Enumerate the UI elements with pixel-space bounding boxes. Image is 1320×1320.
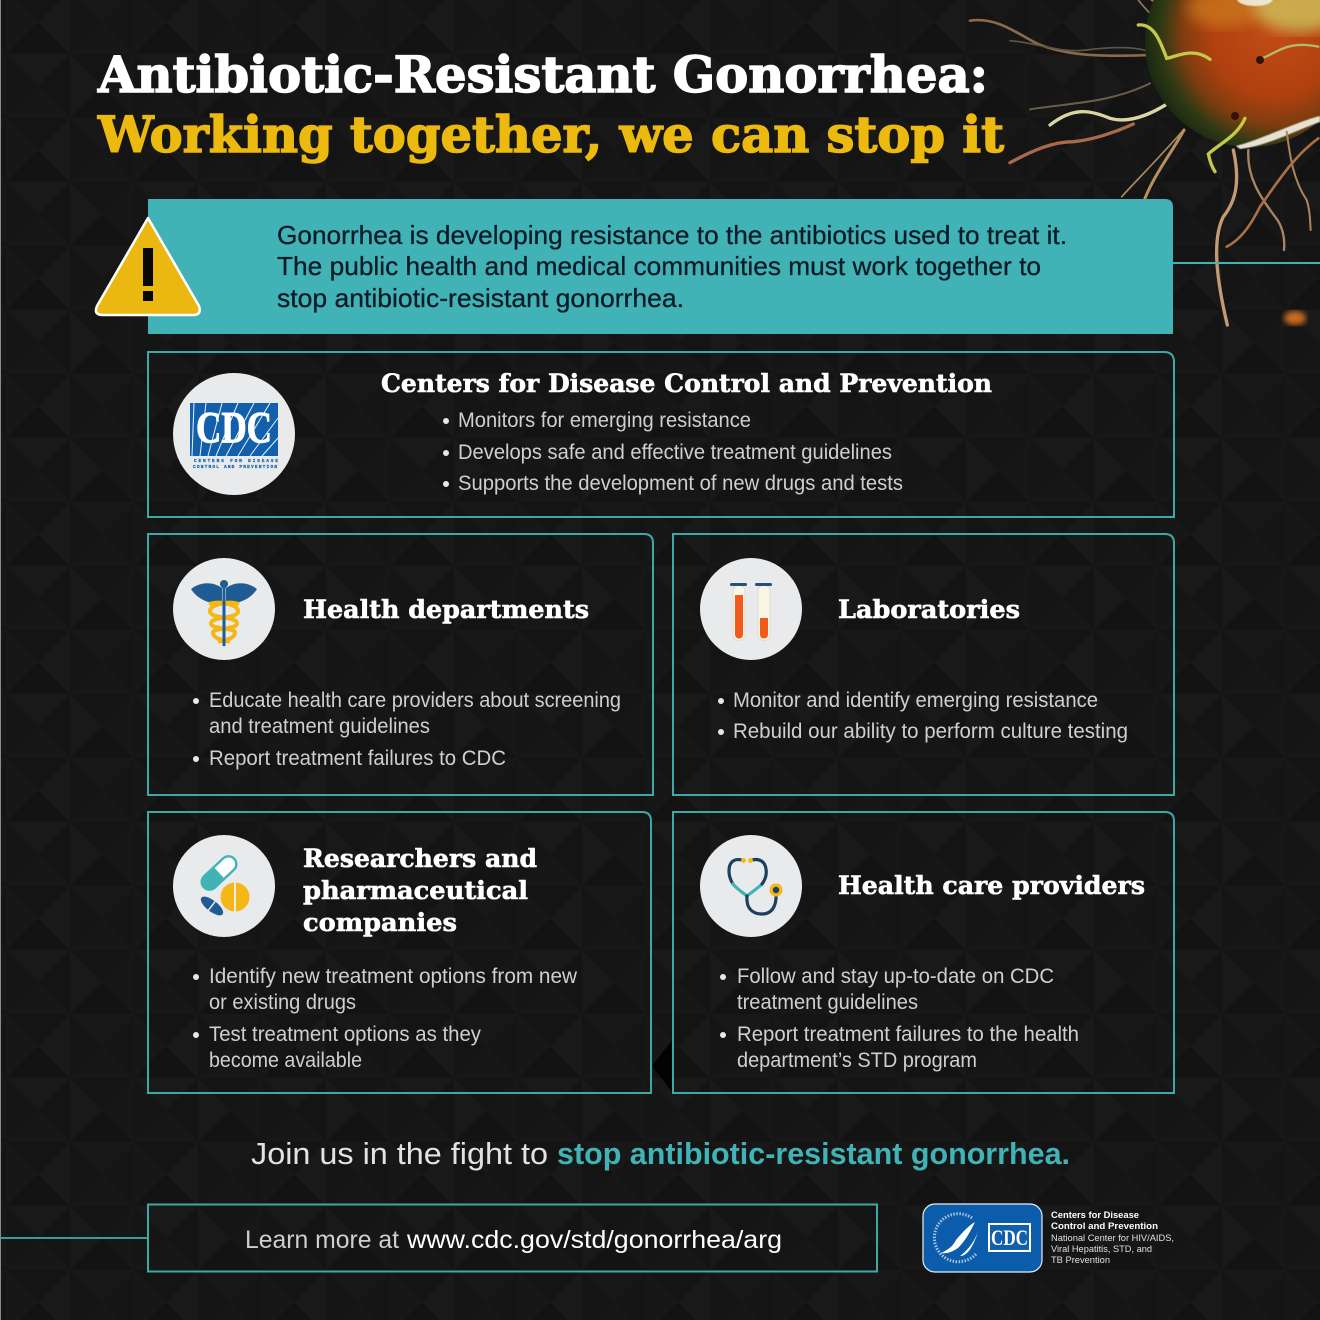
icon: warning triangle <box>96 218 200 315</box>
icon: CDC logo: CDC <box>196 403 272 452</box>
logo: HHS and CDC <box>923 1204 1042 1272</box>
illustration: gonorrhea bacterium <box>970 0 1320 325</box>
heading: Researchers and <box>303 844 537 873</box>
bullet list: Follow and stay up-to-date on CDC <box>737 965 1054 988</box>
title: Working together, we can stop it <box>97 105 1004 164</box>
bullet list: Monitors for emerging resistance <box>458 409 751 432</box>
icon: CDC logo: CONTROL AND PREVENTION <box>193 464 277 470</box>
bullet list: become available <box>209 1049 362 1072</box>
banner: key message <box>148 199 1173 334</box>
logo: HHS and CDC: CDC <box>991 1225 1028 1250</box>
bullet list: treatment guidelines <box>737 991 918 1014</box>
bullet list <box>443 409 903 495</box>
connector line: right of banner <box>1173 262 1320 264</box>
panel: Centers for Disease Control and Prevention <box>148 352 1174 517</box>
bullet list: Identify new treatment options from new <box>209 965 578 988</box>
heading: Laboratories <box>838 595 1020 624</box>
agency text: Control and Prevention <box>1051 1221 1158 1232</box>
link box <box>148 1204 877 1272</box>
heading: companies <box>303 908 457 937</box>
heading: Health care providers <box>838 871 1145 900</box>
bullet list: Rebuild our ability to perform culture testing <box>733 720 1128 743</box>
bullet list <box>718 689 1128 743</box>
bullet list <box>193 689 621 770</box>
bullet list <box>720 965 1079 1072</box>
call to action <box>251 1136 1070 1171</box>
icon: pills <box>173 835 275 937</box>
heading <box>303 844 537 937</box>
call to action: stop antibiotic-resistant gonorrhea. <box>557 1136 1070 1171</box>
call to action: Join us in the fight to <box>251 1136 548 1171</box>
agency text: National Center for HIV/AIDS, <box>1051 1233 1174 1244</box>
icon: test tubes <box>700 558 802 660</box>
agency text: Viral Hepatitis, STD, and <box>1051 1244 1152 1255</box>
icon: caduceus <box>173 558 275 660</box>
bullet list: or existing drugs <box>209 991 356 1014</box>
bullet list: Develops safe and effective treatment guidelines <box>458 441 892 464</box>
icon: CDC logo <box>173 373 295 495</box>
connector line: left of link box <box>0 1237 148 1239</box>
agency text: TB Prevention <box>1051 1255 1110 1266</box>
panel: Health care providers <box>673 812 1174 1093</box>
banner: key message: stop antibiotic-resistant gonorrhea. <box>277 283 684 313</box>
link box: www.cdc.gov/std/gonorrhea/arg <box>406 1226 782 1254</box>
agency text <box>1051 1210 1174 1266</box>
icon: stethoscope <box>700 835 802 937</box>
link box: Learn more at <box>245 1226 399 1254</box>
panel: Laboratories <box>673 534 1174 795</box>
bullet list: Report treatment failures to CDC <box>209 747 506 770</box>
title <box>97 45 1004 164</box>
heading: Centers for Disease Control and Prevention <box>381 369 992 398</box>
agency text: Centers for Disease <box>1051 1210 1139 1221</box>
banner: key message: Gonorrhea is developing resistance to the antibiotics used to treat it. <box>277 220 1067 250</box>
bullet list: Educate health care providers about screening <box>209 689 621 712</box>
panel: Health departments <box>148 534 653 795</box>
bullet list: department’s STD program <box>737 1049 977 1072</box>
heading: pharmaceutical <box>303 876 528 905</box>
icon: CDC logo: CENTERS FOR DISEASE <box>194 458 278 464</box>
title: Antibiotic-Resistant Gonorrhea: <box>97 45 988 104</box>
bullet list <box>193 965 578 1072</box>
decorative notch between panels <box>652 1040 672 1092</box>
banner: key message: The public health and medical communities must work together to <box>277 251 1041 281</box>
bullet list: Monitor and identify emerging resistance <box>733 689 1098 712</box>
bullet list: and treatment guidelines <box>209 715 430 738</box>
bullet list: Report treatment failures to the health <box>737 1023 1079 1046</box>
panel: Researchers and pharmaceutical companies <box>148 812 651 1093</box>
bullet list: Test treatment options as they <box>209 1023 481 1046</box>
heading: Health departments <box>303 595 589 624</box>
bullet list: Supports the development of new drugs and tests <box>458 472 903 495</box>
